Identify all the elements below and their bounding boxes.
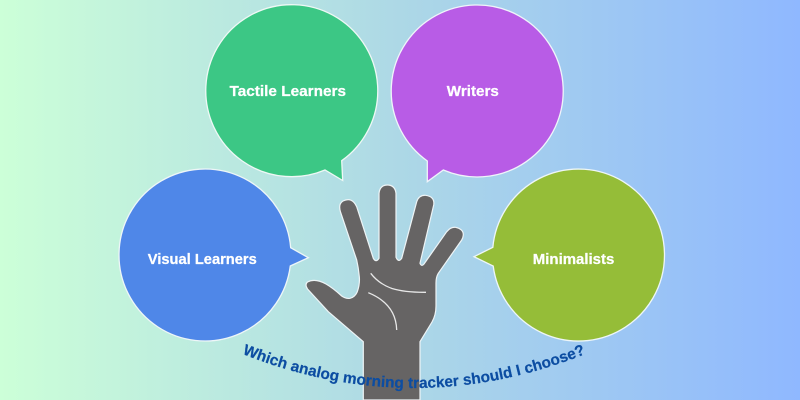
speech bubble: Writers: Writers <box>447 83 499 100</box>
speech bubble: Minimalists <box>474 169 665 341</box>
speech bubble: Tactile Learners: Tactile Learners <box>230 83 346 100</box>
speech bubble: Visual Learners: Visual Learners <box>148 251 257 268</box>
speech bubble: Writers <box>391 5 563 182</box>
curved question text: Which analog morning tracker should I choose? <box>244 344 582 392</box>
speech bubble: Tactile Learners <box>206 5 378 180</box>
palm line: upper <box>371 273 426 292</box>
palm line: lower <box>368 293 397 330</box>
speech bubble: Minimalists: Minimalists <box>533 251 614 268</box>
speech bubble: Visual Learners <box>119 169 308 341</box>
icon: raised hand <box>306 185 463 400</box>
